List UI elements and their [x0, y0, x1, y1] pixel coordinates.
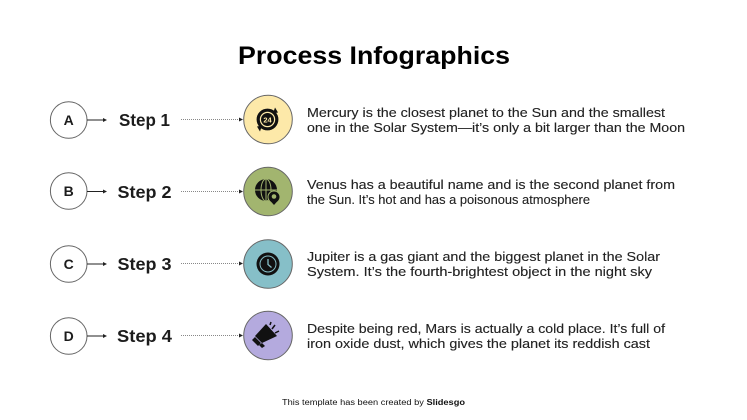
arrow A to step 1	[87, 118, 107, 122]
row D: step 4	[50, 311, 666, 360]
description 2: the Sun. It’s hot and has a poisonous atmosphere	[307, 192, 590, 207]
icon circle: globe with pin	[244, 167, 292, 216]
description 3	[307, 250, 660, 279]
description 2: Venus has a beautiful name and is the second planet from	[307, 178, 675, 192]
step 3 label: Step 3	[118, 254, 172, 274]
description 3: Jupiter is a gas giant and the biggest planet in the Solar	[307, 250, 660, 264]
badge B: B	[64, 183, 74, 199]
title: Process Infographics	[238, 42, 510, 70]
row A: step 1	[50, 95, 685, 144]
badge A: A	[64, 112, 74, 128]
row B: step 2	[50, 167, 675, 216]
badge D	[50, 318, 87, 354]
description 2	[307, 178, 675, 207]
badge B	[50, 173, 87, 209]
icon circle: megaphone	[244, 311, 292, 360]
arrow D to step 4	[87, 334, 107, 338]
description 1: one in the Solar System—it’s only a bit larger than the Moon	[307, 121, 685, 135]
icon circle: clock	[244, 240, 292, 288]
badge A	[50, 102, 87, 138]
description 1: Mercury is the closest planet to the Sun and the smallest	[307, 106, 666, 120]
badge C	[50, 246, 87, 282]
badge C: C	[64, 256, 74, 272]
badge D: D	[64, 328, 74, 344]
description 4: Despite being red, Mars is actually a cold place. It’s full of	[307, 322, 666, 336]
step 4 label: Step 4	[117, 326, 172, 346]
footer credit: This template has been created by Slidesgo	[282, 398, 465, 407]
description 1	[307, 106, 685, 135]
step 2 label: Step 2	[118, 182, 172, 202]
icon circle: 24 hour	[244, 95, 292, 144]
step 1 label: Step 1	[119, 110, 170, 130]
dotted arrow to icon 3	[181, 262, 243, 266]
icon circle: 24 hour: 24	[263, 115, 272, 124]
arrow B to step 2	[87, 190, 107, 194]
description 4: iron oxide dust, which gives the planet its reddish cast	[307, 337, 651, 351]
arrow C to step 3	[87, 262, 107, 266]
row C: step 3	[50, 240, 660, 288]
dotted arrow to icon 2	[181, 190, 243, 194]
dotted arrow to icon 4	[181, 334, 243, 338]
description 3: System. It’s the fourth-brightest object in the night sky	[307, 265, 653, 279]
description 4	[307, 322, 666, 351]
dotted arrow to icon 1	[181, 118, 243, 122]
